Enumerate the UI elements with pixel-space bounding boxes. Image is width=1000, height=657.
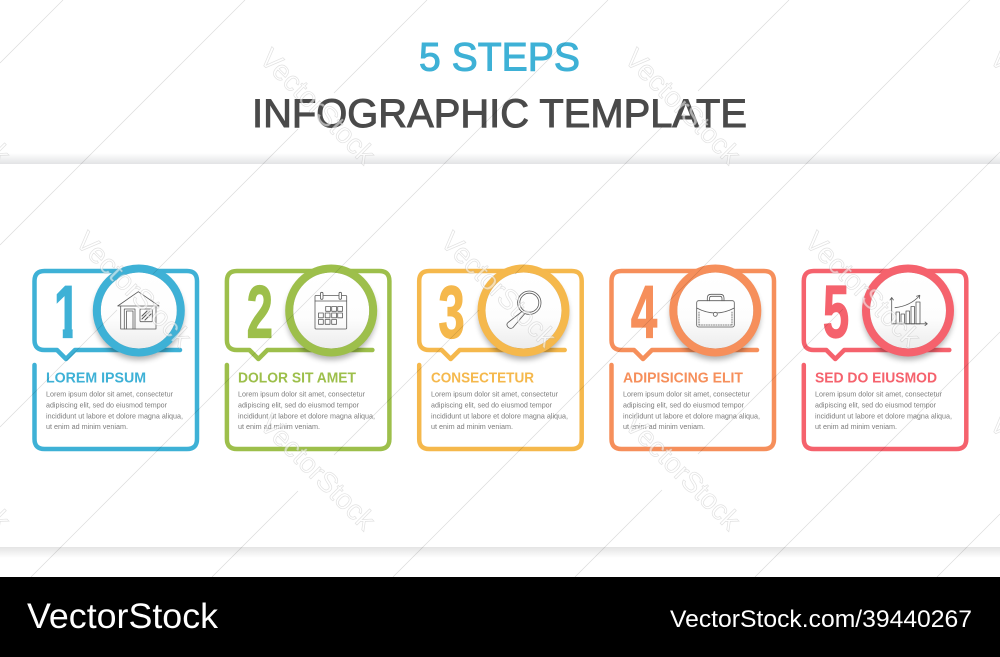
watermark: VectorStock text: VectorStock [799,225,927,354]
step 3 frame [419,271,582,449]
icon: house [118,292,159,329]
panel: step 1 [34,268,197,449]
step 1 body text: ut enim ad minim veniam. [46,422,128,431]
title [252,36,747,136]
watermark: VectorStock text [0,42,1000,537]
step 3 badge [478,268,568,360]
icon: calendar [315,292,347,329]
step 4 body text: incididunt ut labore et dolore magna aliqua, [623,411,760,420]
icon: magnifier [507,291,541,328]
step 2 body text: Lorem ipsum dolor sit amet, consectetur [238,390,366,399]
step 5 frame [804,271,966,449]
watermark: VectorStock text: VectorStock [254,42,382,171]
step 3 body text: ut enim ad minim veniam. [431,422,513,431]
footer image id: VectorStock.com/39440267 [670,606,972,633]
step 1 heading: LOREM IPSUM [46,371,146,387]
panel: step 2 [227,268,389,449]
step 1 body text: adipiscing elit, sed do eiusmod tempor [46,400,168,409]
step 4 number: 4 [631,272,658,354]
step 4 heading: ADIPISICING ELIT [623,371,743,387]
panel: step 5 [804,268,966,449]
title line: 5 steps: 5 STEPS [419,36,580,80]
step 5 body text: ut enim ad minim veniam. [815,422,897,431]
step 2 body text: incididunt ut labore et dolore magna aliqua, [238,411,375,420]
icon: growth chart [890,295,927,326]
step 3 heading: CONSECTETUR [431,371,534,387]
watermark: VectorStock text: VectorStock [435,225,563,354]
step 4 badge [670,268,760,360]
footer logo text: VectorStock [27,597,219,636]
step 2 body text: adipiscing elit, sed do eiusmod tempor [238,400,360,409]
step 2 badge [286,268,376,360]
footer bar [0,577,1000,657]
step 1 frame [34,271,197,449]
step 3 body text: Lorem ipsum dolor sit amet, consectetur [431,390,559,399]
step 2 frame [227,271,389,449]
title line: infographic template: INFOGRAPHIC TEMPLATE [252,92,747,136]
step 4 body text [623,390,760,431]
panel: step 4 [612,268,774,449]
watermark: VectorStock text: VectorStock [254,408,382,537]
step 3 body text [431,390,568,431]
step 2 heading: DOLOR SIT AMET [238,371,356,387]
step 1 body text: Lorem ipsum dolor sit amet, consectetur [46,390,174,399]
step 5 number: 5 [823,272,849,354]
step 4 body text: adipiscing elit, sed do eiusmod tempor [623,400,745,409]
step 2 number: 2 [247,272,273,354]
step 2 body text: ut enim ad minim veniam. [238,422,320,431]
panel: step 3 [419,268,582,449]
step 5 body text: incididunt ut labore et dolore magna aliqua, [815,411,952,420]
icon: briefcase [697,294,734,327]
step 3 number: 3 [438,272,465,354]
step 5 body text: adipiscing elit, sed do eiusmod tempor [815,400,937,409]
step 1 number: 1 [54,272,80,354]
panel: white content band [0,153,1000,558]
step 3 body text: incididunt ut labore et dolore magna aliqua, [431,411,568,420]
step 5 body text: Lorem ipsum dolor sit amet, consectetur [815,390,943,399]
step 1 badge [94,268,184,360]
watermark: VectorStock text: VectorStock [619,42,747,171]
step 1 body text: incididunt ut labore et dolore magna aliqua, [46,411,183,420]
step 4 frame [612,271,774,449]
step 5 body text [815,390,952,431]
step 4 body text: ut enim ad minim veniam. [623,422,705,431]
step 5 badge [863,268,953,360]
step 5 heading: SED DO EIUSMOD [815,371,937,387]
watermark: VectorStock text: VectorStock [619,408,747,537]
step 1 body text [46,390,183,431]
watermark: VectorStock text: VectorStock [70,225,198,354]
step 4 body text: Lorem ipsum dolor sit amet, consectetur [623,390,751,399]
step 2 body text [238,390,375,431]
step 3 body text: adipiscing elit, sed do eiusmod tempor [431,400,553,409]
